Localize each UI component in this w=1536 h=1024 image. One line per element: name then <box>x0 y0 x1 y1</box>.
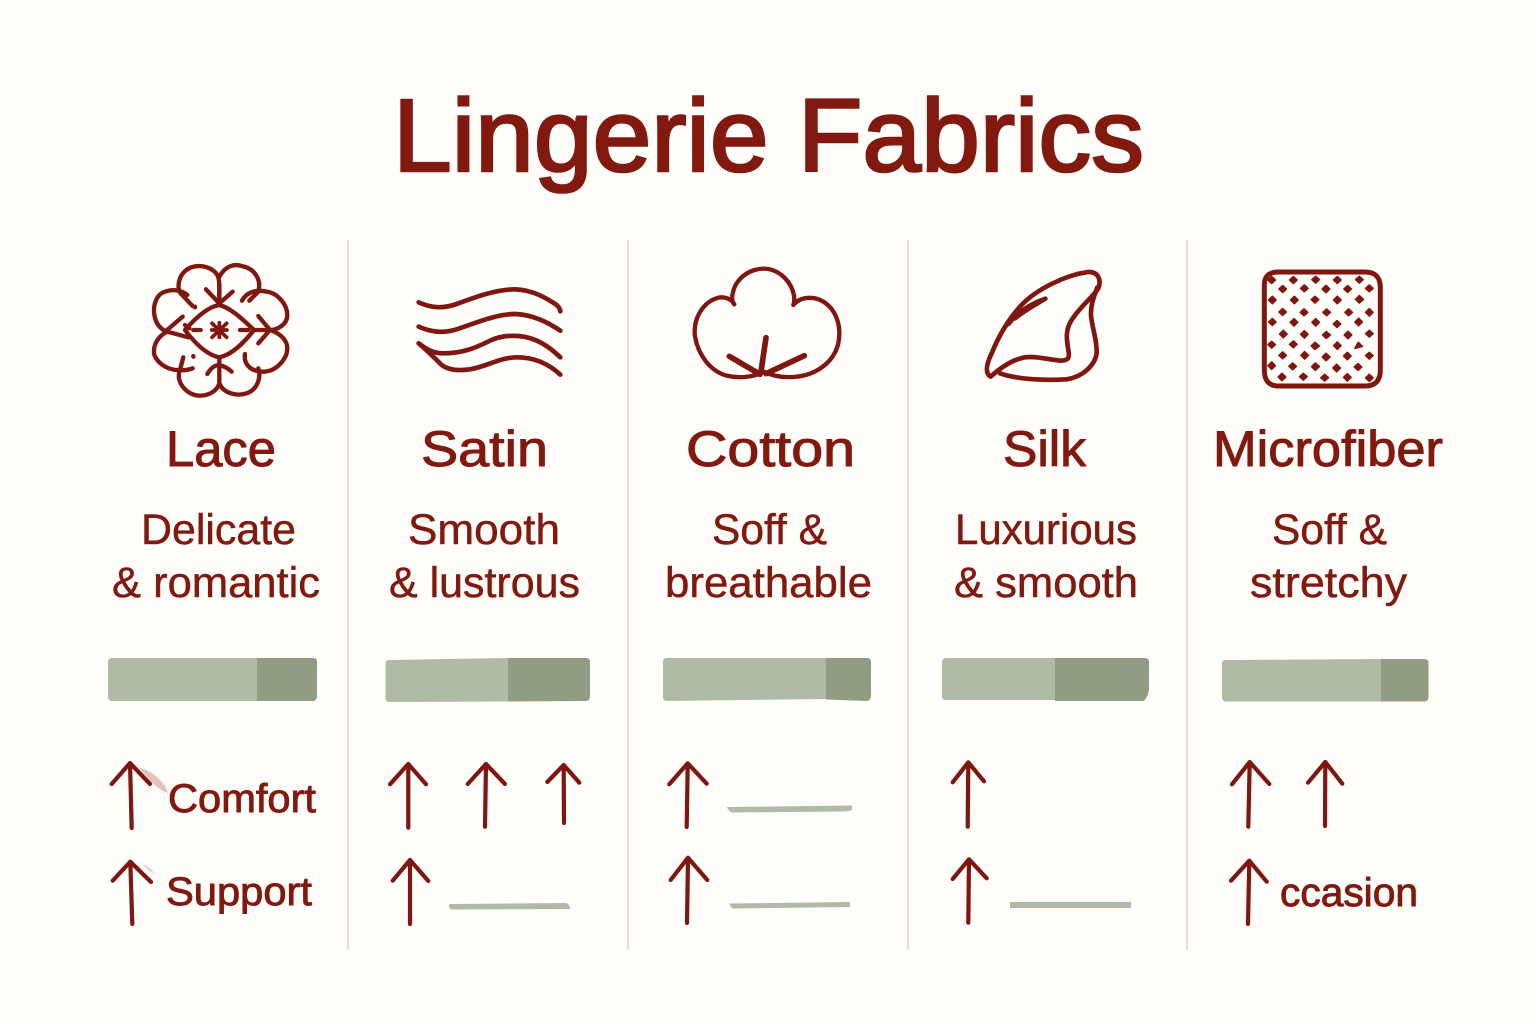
description: silk <box>954 506 1138 607</box>
arrow: cotton row 2 <box>671 858 707 923</box>
description: satin: Smooth <box>408 506 560 554</box>
bar: microfiber <box>1222 659 1428 702</box>
icon: cotton boll <box>695 269 839 377</box>
heading: microfiber: Microfiber <box>1213 421 1443 477</box>
label: occasion: ccasion <box>1280 871 1418 915</box>
description: microfiber: stretchy <box>1250 559 1408 607</box>
rating line: silk <box>1010 902 1131 908</box>
icon: microfiber swatch <box>1264 272 1380 386</box>
icon: satin waves <box>419 289 560 375</box>
description: lace: Delicate <box>141 506 296 554</box>
description: microfiber <box>1250 506 1408 607</box>
rating line: satin <box>449 903 570 910</box>
panel: lace <box>108 265 320 924</box>
arrow: microfiber row 1 b <box>1308 762 1342 826</box>
panel: satin <box>386 289 590 924</box>
description: cotton: breathable <box>665 559 872 607</box>
panel: cotton <box>663 269 872 923</box>
arrow: microfiber row 2 <box>1231 861 1267 924</box>
icon: lace flower <box>154 265 287 396</box>
arrow: microfiber row 1 a <box>1232 762 1269 827</box>
description: satin <box>389 506 580 607</box>
rating line: cotton row 1 <box>727 806 852 812</box>
rating line: cotton row 2 <box>729 902 850 908</box>
arrow: silk row 1 <box>953 762 984 827</box>
bar: satin <box>386 658 590 702</box>
heading: silk: Silk <box>1003 421 1087 477</box>
swatch outline <box>1264 272 1380 386</box>
label: support: Support <box>166 870 312 914</box>
description: cotton: Soff & <box>712 506 827 554</box>
title: Lingerie Fabrics <box>393 78 1144 193</box>
label: comfort: Comfort <box>168 777 316 821</box>
arrow: silk row 2 <box>953 859 987 923</box>
description: silk: Luxurious <box>955 506 1137 554</box>
arrow: cotton row 1 <box>669 763 707 827</box>
heading: satin: Satin <box>421 421 548 477</box>
description: microfiber: Soff & <box>1272 506 1387 554</box>
arrow: satin row 2 <box>393 860 428 924</box>
description: cotton <box>665 506 872 607</box>
swatch dots <box>1268 276 1373 381</box>
panel: microfiber <box>1213 272 1443 924</box>
heading: lace: Lace <box>166 421 276 477</box>
panel: silk <box>942 272 1149 923</box>
arrow: support <box>113 862 154 924</box>
bar: lace <box>108 658 317 701</box>
heading: cotton: Cotton <box>686 421 855 477</box>
description: lace: & romantic <box>112 559 320 607</box>
icon: silk fold <box>987 272 1100 380</box>
bar: cotton <box>663 658 871 701</box>
arrow: satin row 1 b <box>468 764 505 827</box>
description: silk: & smooth <box>954 559 1138 607</box>
arrow: comfort <box>112 763 168 828</box>
arrow: satin row 1 a <box>390 764 426 828</box>
arrow: satin row 1 c <box>547 765 579 823</box>
bar: silk <box>942 658 1149 701</box>
description: lace <box>112 506 320 607</box>
description: satin: & lustrous <box>389 559 580 607</box>
